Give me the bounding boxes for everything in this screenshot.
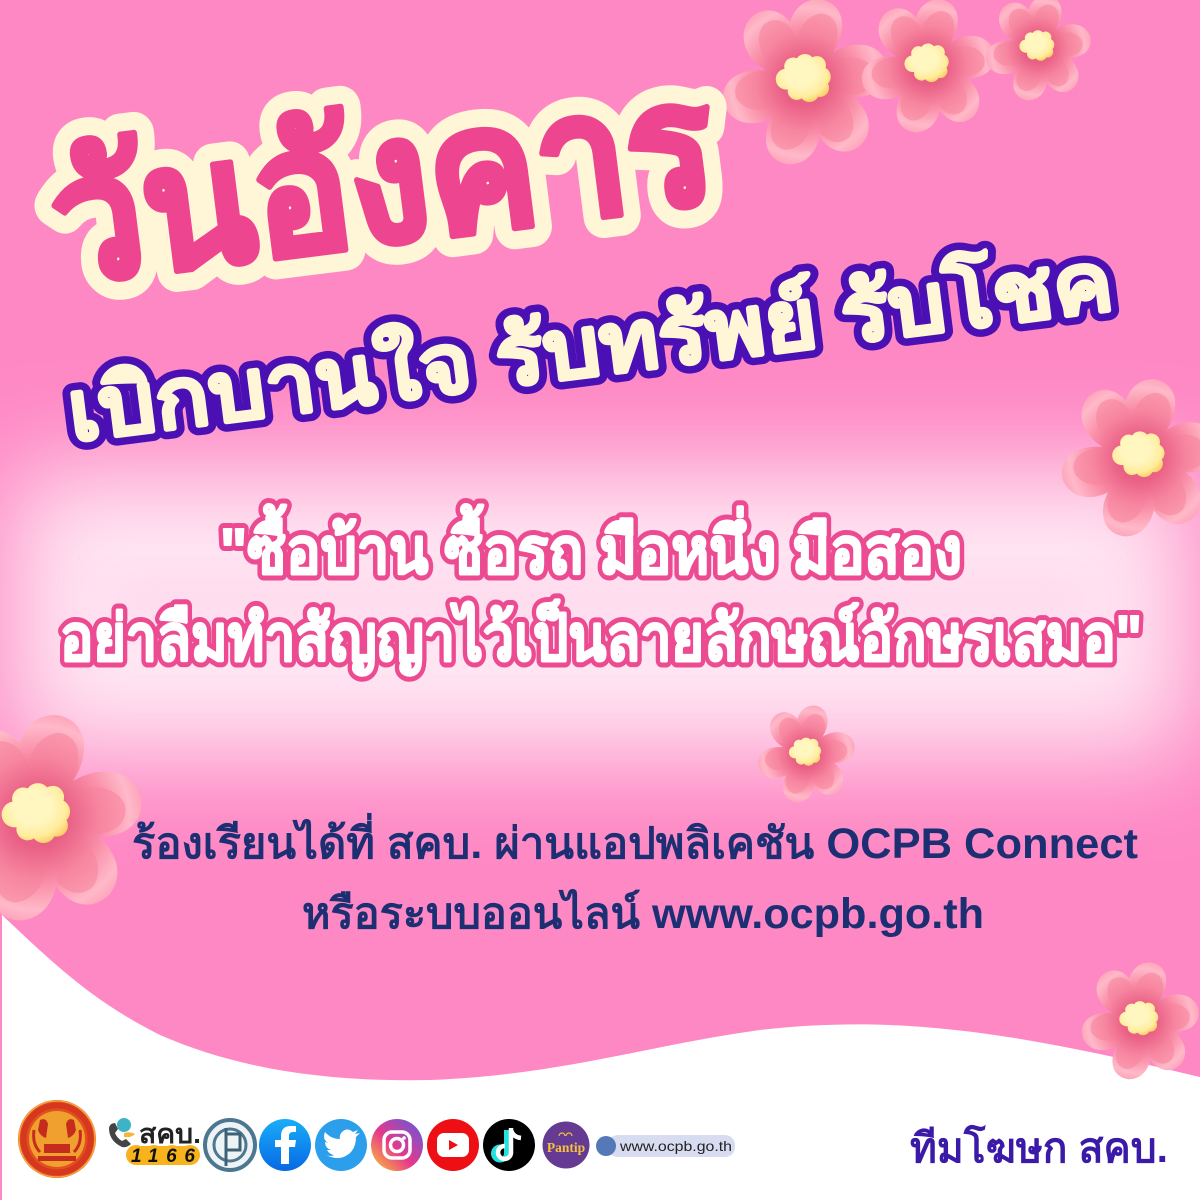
logo: hotline 1166	[109, 1118, 201, 1167]
flower middle	[755, 702, 857, 806]
title: วันอังคาร	[41, 46, 724, 320]
flower left	[0, 707, 145, 929]
icon: facebook	[259, 1119, 311, 1171]
icon: youtube	[427, 1119, 479, 1171]
icon: tiktok	[483, 1119, 535, 1171]
quote line 1: "ซื้อบ้าน ซื้อรถ มือหนึ่ง มือสอง	[220, 504, 962, 587]
logo: hotline 1166: 1166	[131, 1146, 195, 1167]
glow band behind quote	[10, 470, 1190, 755]
logo: pantip	[542, 1122, 590, 1168]
team credit: ทีมโฆษก สคบ.	[910, 1124, 1168, 1171]
white wave footer	[2, 915, 1200, 1200]
title: วันอังคาร	[41, 46, 724, 320]
flower top 1	[718, 0, 891, 171]
flower top 3	[983, 0, 1093, 105]
subtitle: เบิกบานใจ รับทรัพย์ รับโชค	[62, 233, 1118, 459]
logo: OCPB seal	[18, 1100, 96, 1178]
flower lower right	[1079, 958, 1200, 1084]
website badge	[596, 1135, 735, 1157]
soft pink middle of glow	[100, 585, 1100, 615]
logo: hotline 1166: สคบ.	[139, 1119, 201, 1149]
icon: twitter	[315, 1119, 367, 1171]
contact line 2: หรือระบบออนไลน์ www.ocpb.go.th	[302, 888, 984, 938]
flower right	[1057, 373, 1200, 543]
logo: OCPB circle	[205, 1120, 255, 1170]
flower top 2	[858, 0, 997, 138]
subtitle: เบิกบานใจ รับทรัพย์ รับโชค	[62, 233, 1118, 459]
website badge: www.ocpb.go.th	[619, 1138, 732, 1154]
icon: instagram	[371, 1119, 423, 1171]
contact line 1: ร้องเรียนได้ที่ สคบ. ผ่านแอปพลิเคชัน OCPB Connect	[132, 813, 1138, 868]
logo: pantip: Pantip	[547, 1140, 585, 1155]
quote line 1: "ซื้อบ้าน ซื้อรถ มือหนึ่ง มือสอง	[220, 504, 962, 587]
